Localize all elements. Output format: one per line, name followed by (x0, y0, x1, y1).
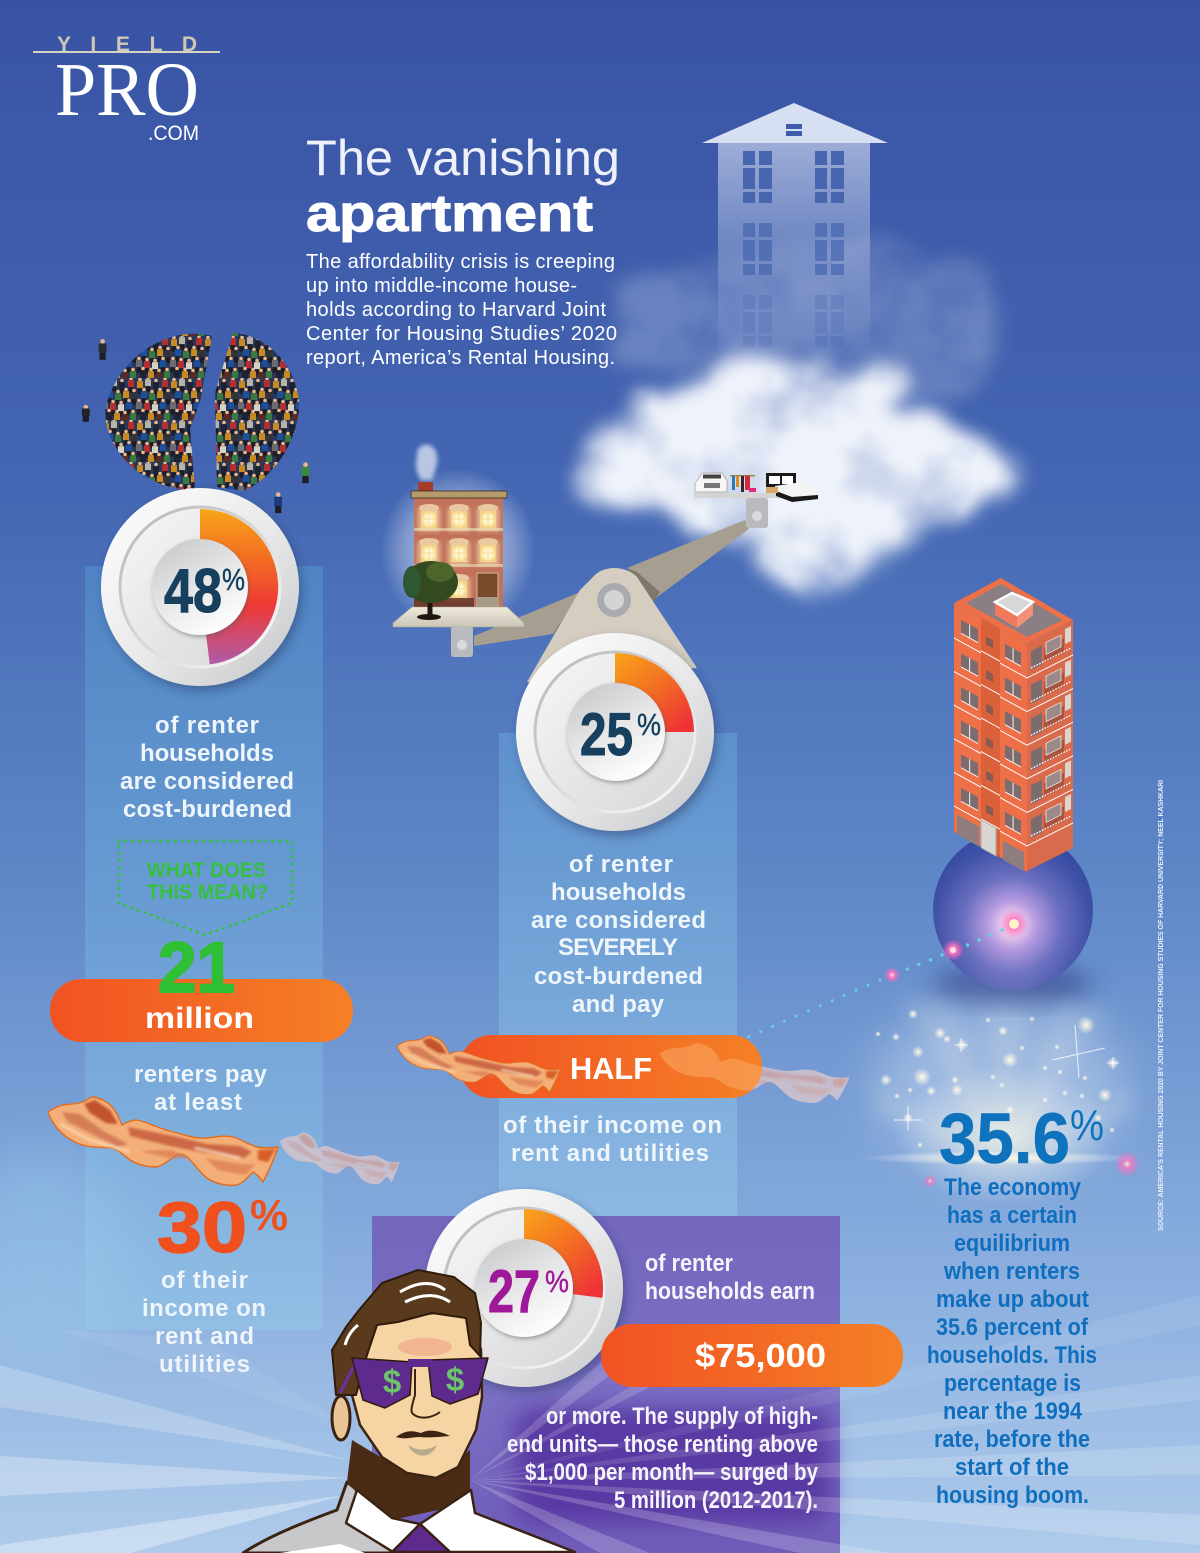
text: renters pay at least (134, 1061, 268, 1116)
stat: 30 percent (157, 1189, 288, 1268)
sparkles behind the statistic (860, 1000, 1140, 1205)
text: economy equilibrium paragraph: start of the (955, 1454, 1069, 1481)
icon: bacon strip and ghost slice (left) (48, 1097, 400, 1185)
light blue side glow (0, 1150, 120, 1370)
text: economy equilibrium paragraph: percentage is (944, 1370, 1081, 1397)
text: of their income on rent and utilities: of their (161, 1267, 248, 1294)
intro paragraph: holds according to Harvard Joint (306, 299, 606, 321)
dial: 25 percent (516, 633, 714, 831)
text: of their income on rent and utilities (503, 1112, 722, 1167)
intro paragraph: Center for Housing Studies’ 2020 (306, 323, 617, 345)
text: economy equilibrium paragraph: make up about (936, 1286, 1089, 1313)
text: of their income on rent and utilities: utilities (159, 1351, 250, 1378)
title (306, 129, 620, 243)
text: 48 percent caption: cost-burdened (123, 796, 292, 823)
text: 25 percent caption: cost-burdened (534, 963, 703, 990)
text: economy equilibrium paragraph: has a certain (947, 1202, 1077, 1229)
stat: 30 percent: 30 (157, 1189, 247, 1268)
pill: 21 million: 21 (158, 929, 235, 1008)
ghost building in the sky (702, 103, 888, 358)
pill: half (396, 1035, 762, 1098)
text: of renter households earn: households earn (645, 1278, 815, 1305)
intro paragraph (306, 251, 617, 369)
text: economy equilibrium paragraph: The economy (944, 1174, 1082, 1201)
text: of renter households earn (645, 1250, 815, 1305)
panel: center column (499, 733, 737, 1223)
stat: 30 percent: % (250, 1191, 288, 1240)
callout: what does this mean: WHAT DOES (147, 859, 266, 882)
text: 25 percent caption: of renter (569, 851, 673, 878)
dial: 48 percent (101, 488, 299, 686)
title: The vanishing (306, 129, 620, 186)
text: 25 percent caption: households (551, 879, 686, 906)
dial: 25 percent: 25 (580, 701, 633, 768)
text: economy equilibrium paragraph: 35.6 percent of (936, 1314, 1089, 1341)
text: economy equilibrium paragraph (927, 1174, 1097, 1509)
pill: 75,000 dollars: $75,000 (695, 1337, 826, 1374)
text: economy equilibrium paragraph: households. This (927, 1342, 1097, 1369)
illustration: man with dollar sunglasses: $ (446, 1361, 464, 1398)
text: economy equilibrium paragraph: housing boom. (936, 1482, 1089, 1509)
text: of their income on rent and utilities (142, 1267, 266, 1378)
text: 25 percent caption: are considered (531, 907, 706, 934)
dial: 27 percent: % (545, 1264, 569, 1299)
dial: 27 percent: 27 (488, 1258, 540, 1325)
logo: Yield Pro: PRO (55, 48, 199, 132)
text: 25 percent caption (531, 851, 706, 1018)
text: 25 percent caption: and pay (572, 991, 665, 1018)
text: of renter households earn: of renter (645, 1250, 733, 1277)
pill: 21 million: million (145, 1002, 254, 1035)
dial: 27 percent (425, 1189, 623, 1387)
text: economy equilibrium paragraph: near the 1994 (943, 1398, 1083, 1425)
text: 25 percent caption: SEVERELY (558, 934, 678, 961)
illustration: man with dollar sunglasses (243, 1270, 575, 1553)
text: 48 percent caption: are considered (120, 768, 294, 795)
logo: Yield Pro: Y I E L D (57, 33, 197, 56)
icon: isometric apartment tower on sphere (932, 578, 1093, 1005)
text: supply of high-end units: or more. The supply of high- (546, 1403, 818, 1430)
dial: 48 percent: % (222, 562, 245, 597)
pill: 75,000 dollars (601, 1324, 903, 1387)
source credit: SOURCE: AMERICA’S RENTAL HOUSING 2020 BY JOINT CENTER FOR HOUSING STUDIES OF HARVARD UNIVERSITY; NEEL KASHKARI (1158, 780, 1165, 1231)
intro paragraph: The affordability crisis is creeping (306, 251, 615, 273)
icon: car, wardrobe and bed on the shelf (695, 473, 818, 502)
text: supply of high-end units (507, 1403, 819, 1514)
panel: purple income panel (372, 1216, 840, 1553)
text: supply of high-end units: 5 million (2012-2017). (614, 1487, 818, 1514)
sunburst rays (0, 1295, 1200, 1553)
text: economy equilibrium paragraph: equilibrium (954, 1230, 1070, 1257)
seesaw: beam, platforms and fulcrum (451, 493, 818, 682)
text: renters pay at least: renters pay (134, 1061, 268, 1088)
logo: Yield Pro: .COM (148, 122, 199, 145)
text: 48 percent caption (120, 712, 294, 823)
cloud (571, 359, 1010, 583)
icon: ghost bacon behind half pill (660, 1043, 850, 1103)
text: supply of high-end units: end units— those renting above (507, 1431, 818, 1458)
logo: Yield Pro (33, 33, 220, 145)
dial: 25 percent: % (637, 707, 661, 742)
icon: brownstone building (380, 444, 536, 632)
text: supply of high-end units: $1,000 per month— surged by (525, 1459, 819, 1486)
callout: what does this mean: THIS MEAN? (147, 881, 268, 904)
text: economy equilibrium paragraph: rate, before the (934, 1426, 1090, 1453)
panel: left column (85, 566, 323, 1330)
text: renters pay at least: at least (154, 1089, 242, 1116)
text: of their income on rent and utilities: income on (142, 1295, 266, 1322)
hazy cloud behind building (610, 245, 1000, 400)
text: 48 percent caption: households (140, 740, 274, 767)
lens flares and dotted trail (748, 910, 1028, 1037)
callout: what does this mean (119, 841, 292, 935)
pill: 21 million (50, 929, 353, 1042)
stat: 35.6 percent: % (1070, 1101, 1104, 1150)
text: 48 percent caption: of renter (155, 712, 259, 739)
text: of their income on rent and utilities: of their income on (503, 1112, 722, 1139)
illustration: man with dollar sunglasses: $ (383, 1363, 401, 1400)
text: of their income on rent and utilities: rent and utilities (511, 1140, 709, 1167)
icon: crowd forming a pie chart (82, 333, 309, 513)
pill: half: HALF (570, 1051, 652, 1086)
intro paragraph: report, America’s Rental Housing. (306, 347, 615, 369)
text: economy equilibrium paragraph: when renters (943, 1258, 1080, 1285)
intro paragraph: up into middle-income house- (306, 275, 577, 297)
stat: 35.6 percent: 35.6 (939, 1100, 1070, 1179)
title: apartment (306, 185, 593, 243)
dial: 48 percent: 48 (164, 557, 222, 626)
text: of their income on rent and utilities: rent and (155, 1323, 254, 1350)
